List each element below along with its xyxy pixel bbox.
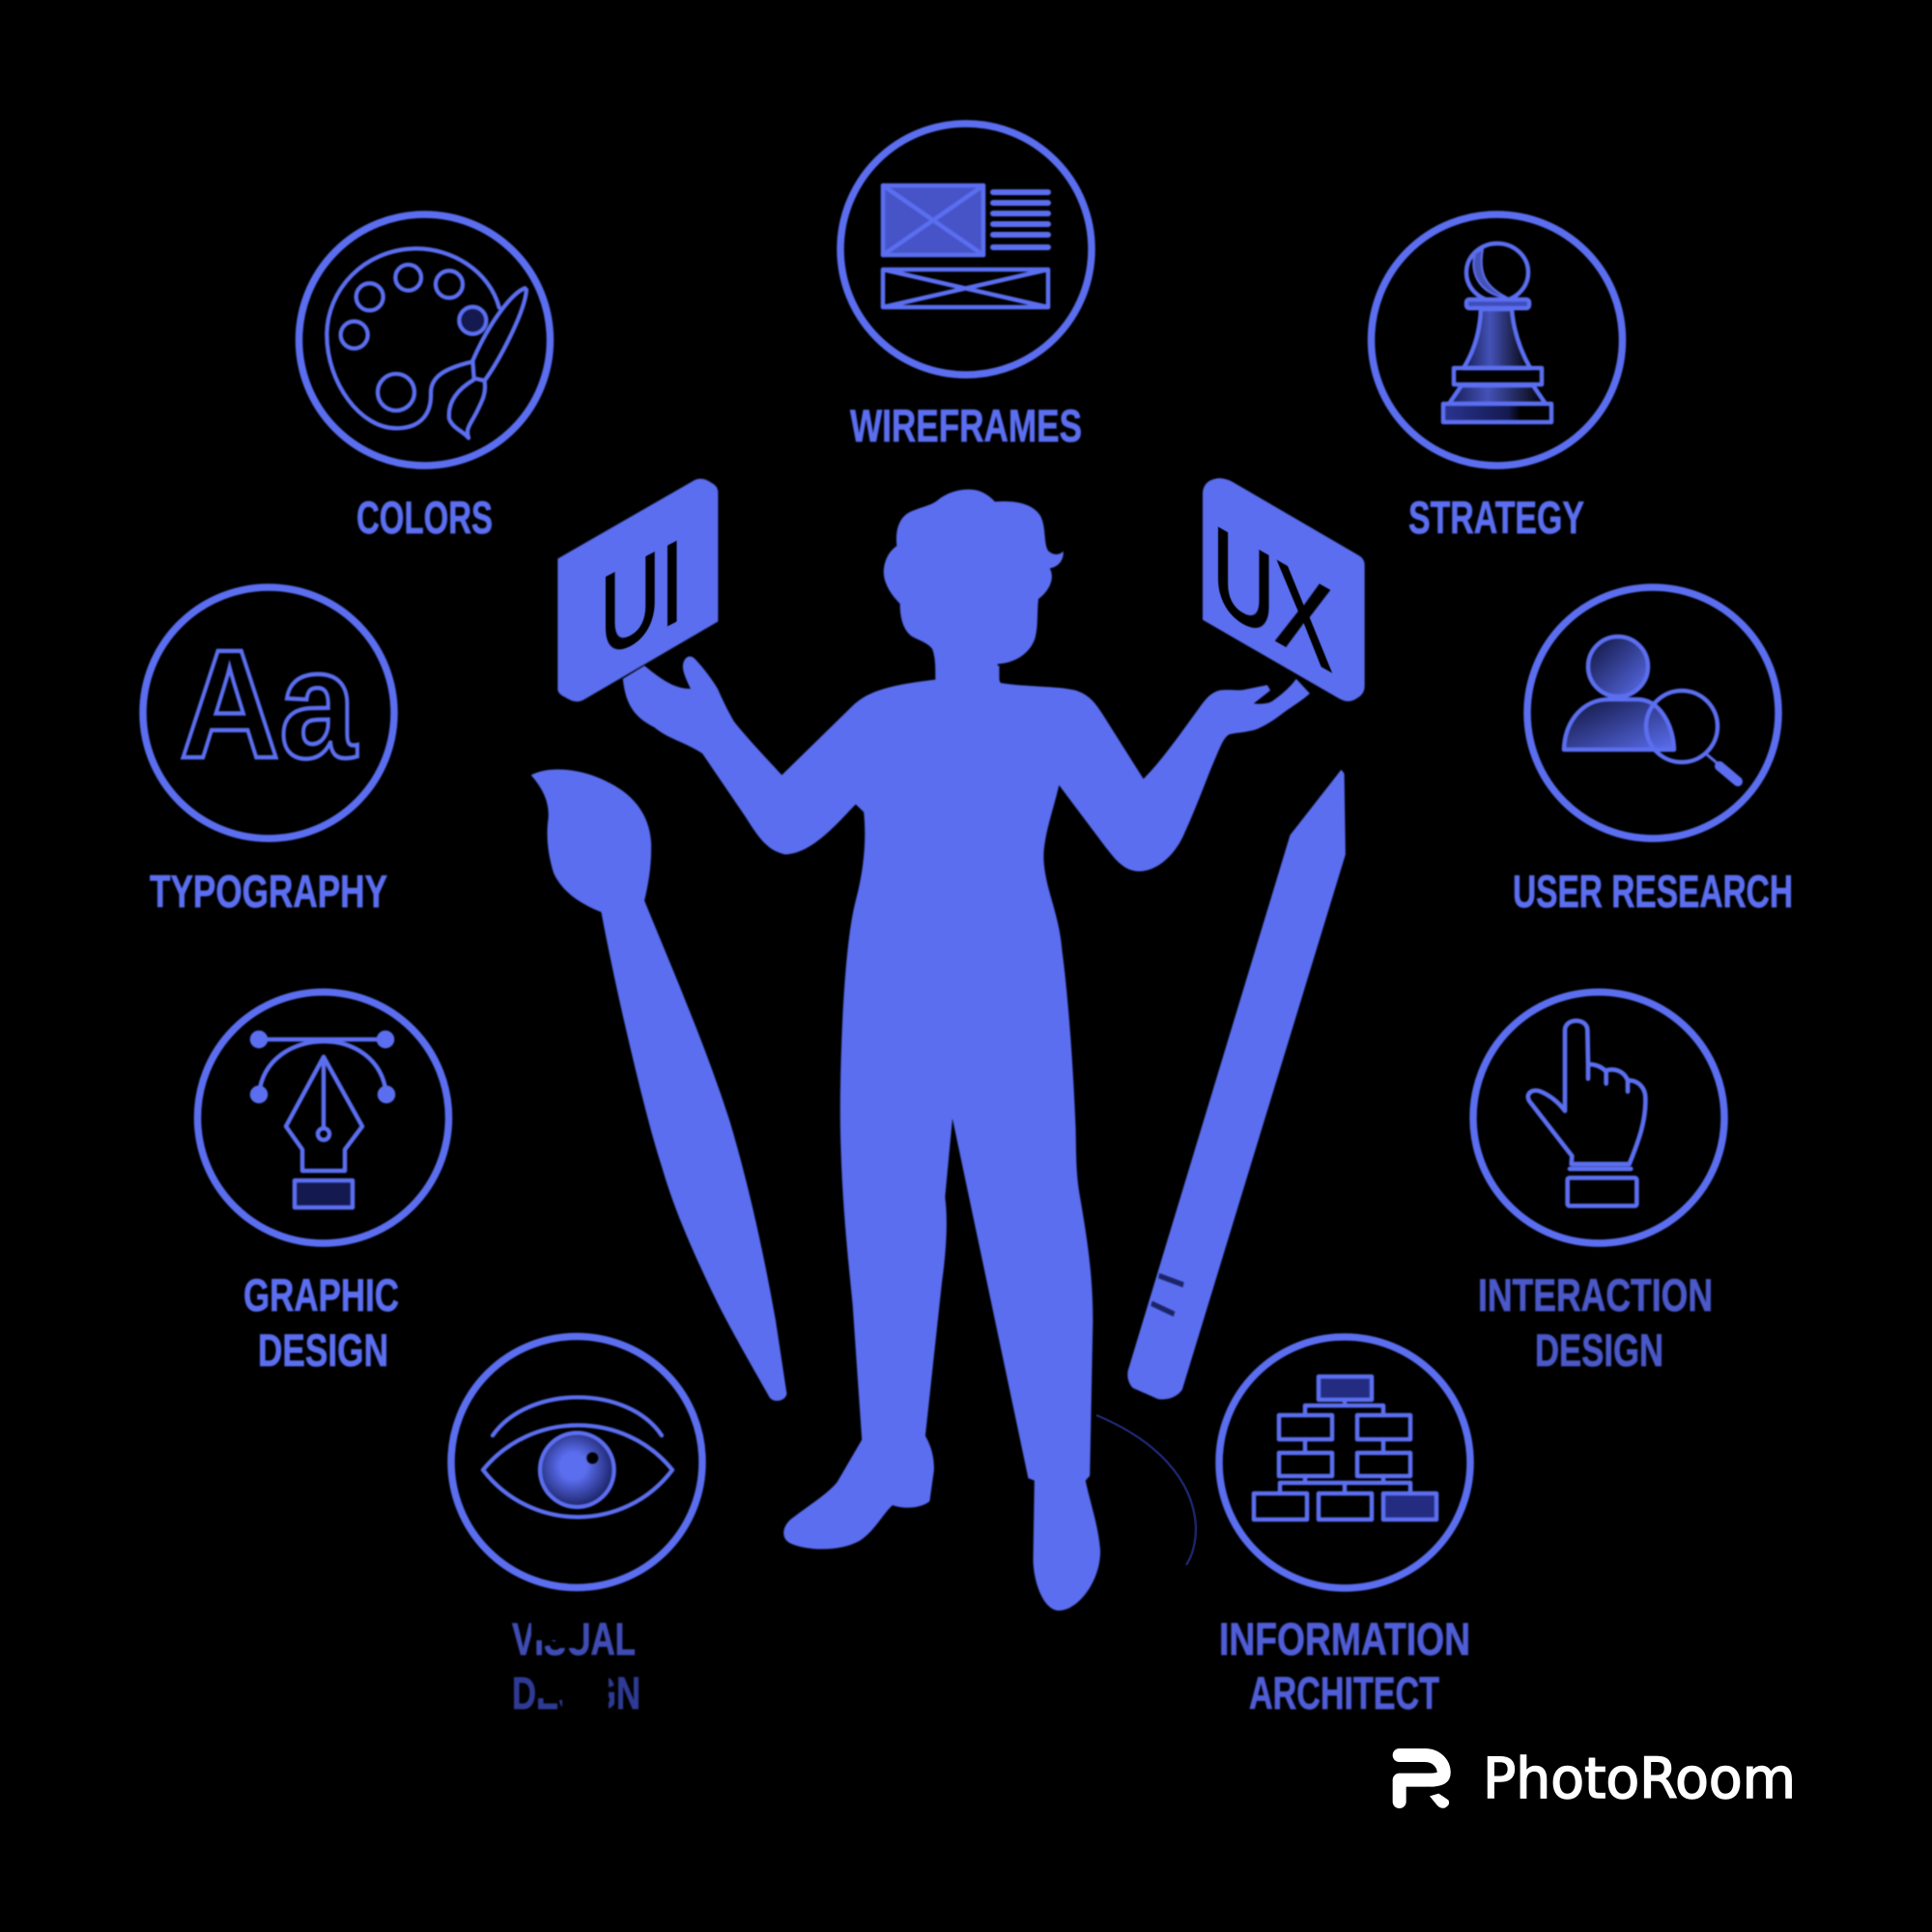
logo bowl fill and leg (1430, 1771, 1451, 1808)
user body (1564, 699, 1674, 750)
label (243, 1269, 399, 1376)
icon: pointing hand (1528, 1021, 1645, 1206)
central figure group (531, 478, 1365, 1610)
line one: INTERACTION (1478, 1269, 1713, 1321)
base (1443, 404, 1551, 422)
line two: ARCHITECT (1249, 1667, 1439, 1719)
user head (1588, 637, 1648, 696)
body (1463, 309, 1530, 368)
label: TYPOGRAPHY (150, 866, 387, 917)
panel: user research (1513, 587, 1793, 917)
icon: eye (483, 1397, 672, 1517)
lens (1646, 691, 1718, 762)
line one: INFORMATION (1219, 1613, 1470, 1664)
colors ring (299, 214, 551, 466)
icon: palette and brush (327, 248, 526, 438)
handle line (261, 1037, 385, 1041)
text lines (993, 192, 1048, 247)
information architect ring (1219, 1337, 1470, 1588)
line two: DESIGN (258, 1324, 388, 1376)
person body silhouette (623, 656, 1310, 1610)
icon: wireframe layout (883, 185, 1048, 307)
label: WIREFRAMES (850, 400, 1082, 451)
UI card shape (557, 479, 718, 701)
banner placeholder (883, 270, 1048, 307)
panel: typography (143, 587, 394, 917)
brush (449, 288, 526, 438)
pawn head (1466, 243, 1528, 301)
cuff (1568, 1178, 1636, 1206)
interaction design ring (1473, 992, 1724, 1243)
bezier arc (259, 1041, 386, 1094)
user research ring (1527, 587, 1778, 838)
icon: Aa letters: Aa (180, 617, 357, 790)
label: USER RESEARCH (1513, 866, 1793, 917)
label (1478, 1269, 1713, 1376)
logo mark (1400, 1755, 1451, 1808)
glint (586, 1452, 598, 1463)
nib hole (318, 1128, 329, 1140)
platform (1454, 368, 1542, 384)
line two: DESIGN (1535, 1324, 1663, 1376)
collar (1466, 299, 1529, 308)
panel: colors (299, 214, 551, 543)
label: STRATEGY (1408, 492, 1584, 543)
panel: visual design (451, 1337, 702, 1719)
icon: org chart (1254, 1377, 1436, 1520)
iris (540, 1433, 614, 1507)
label: COLORS (356, 492, 493, 543)
icon: user with magnifier (1564, 637, 1738, 781)
fading patches (531, 1619, 609, 1714)
pencil marks (1151, 1276, 1183, 1314)
line one: VISUAL (512, 1613, 636, 1664)
skirt (1449, 385, 1546, 404)
nib (286, 1057, 362, 1171)
UI card text: UI (600, 515, 684, 685)
thin dark curve near foot (1096, 1415, 1196, 1565)
paint wells (341, 265, 486, 411)
visual design ring (451, 1337, 702, 1588)
eye outline (483, 1425, 672, 1517)
panel: information architect (1219, 1337, 1470, 1719)
strategy ring (1372, 214, 1623, 466)
UX card text: UX (1212, 499, 1332, 696)
label (1219, 1613, 1470, 1719)
image placeholder (883, 185, 983, 255)
wireframes ring (840, 124, 1092, 375)
panel: graphic design (197, 992, 448, 1376)
UX card shape (1203, 478, 1365, 701)
icon: pen tool (252, 1033, 393, 1208)
panel: strategy (1372, 214, 1623, 543)
watermark: PhotoRoom (1400, 1746, 1796, 1811)
pencil silhouette (1127, 770, 1346, 1400)
panel: wireframes (840, 124, 1092, 451)
line one: GRAPHIC (243, 1269, 399, 1321)
graphic design ring (197, 992, 448, 1243)
icon: chess pawn (1443, 243, 1551, 422)
wordmark: PhotoRoom (1483, 1746, 1796, 1811)
brow (493, 1397, 662, 1435)
line two: DESIGN (512, 1667, 640, 1719)
logo R stroke (1400, 1755, 1444, 1802)
paintbrush silhouette (531, 769, 786, 1401)
palette outline (327, 248, 499, 428)
base rectangle (295, 1180, 353, 1208)
handle (1708, 755, 1719, 765)
typography ring (143, 587, 394, 838)
panel: interaction design (1473, 992, 1724, 1376)
person head and hair (884, 490, 1064, 686)
hand (1528, 1021, 1645, 1169)
label (512, 1613, 640, 1719)
boxes (1254, 1377, 1436, 1520)
handle dots (252, 1033, 393, 1101)
connectors (1280, 1400, 1410, 1493)
